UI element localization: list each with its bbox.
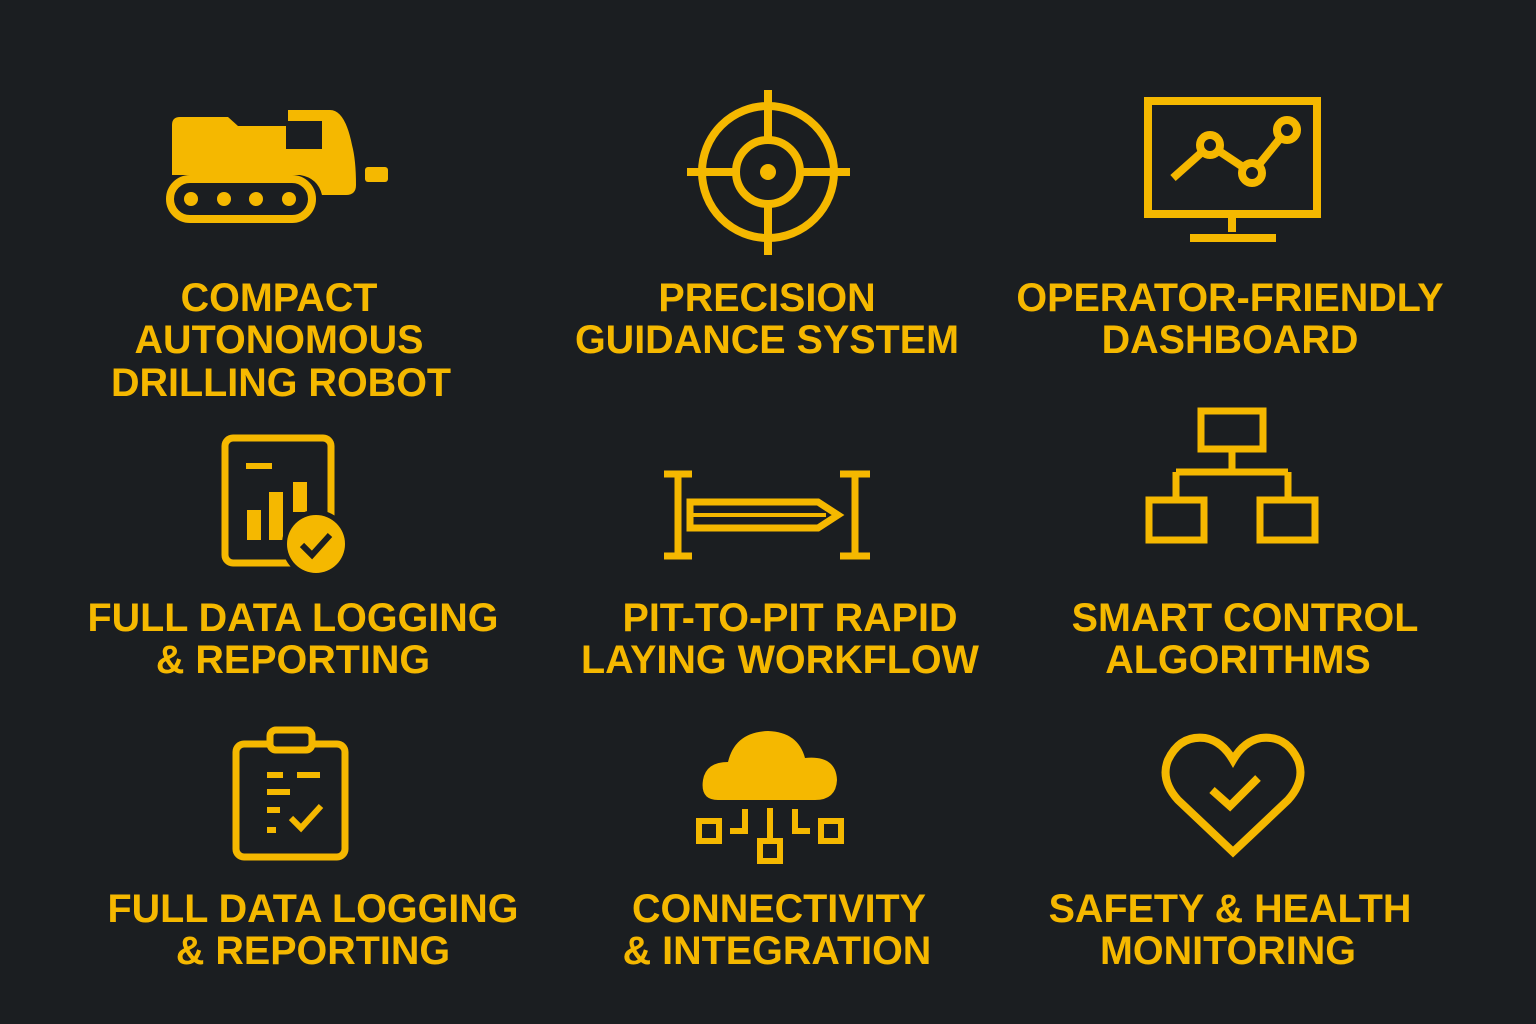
title: data logging 2: FULL DATA LOGGING	[107, 887, 519, 931]
title: smart control: ALGORITHMS	[1105, 638, 1371, 682]
title: safety: MONITORING	[1100, 929, 1356, 973]
title: connectivity: & INTEGRATION	[623, 929, 931, 973]
title: dashboard	[1016, 276, 1444, 362]
title: pit-to-pit: PIT-TO-PIT RAPID	[622, 596, 958, 640]
title: precision: GUIDANCE SYSTEM	[575, 318, 959, 362]
title: data logging 2: & REPORTING	[176, 929, 450, 973]
icon: target	[687, 90, 850, 255]
title: dashboard: OPERATOR-FRIENDLY	[1016, 276, 1444, 320]
title: safety: SAFETY & HEALTH	[1049, 887, 1411, 931]
title: pit-to-pit	[581, 596, 980, 682]
icon: cloud	[699, 731, 841, 861]
title: connectivity: CONNECTIVITY	[632, 887, 926, 931]
icon: pit-to-pit	[664, 474, 870, 556]
title: dashboard: DASHBOARD	[1102, 318, 1358, 362]
title: compact robot	[111, 276, 451, 405]
title: safety	[1049, 887, 1411, 973]
title: precision	[575, 276, 959, 362]
title: precision: PRECISION	[658, 276, 876, 320]
title: compact robot: DRILLING ROBOT	[111, 361, 451, 405]
title: data logging 2	[107, 887, 519, 973]
icon: report	[225, 438, 350, 578]
icon: org chart	[1149, 411, 1315, 540]
title: connectivity	[623, 887, 931, 973]
icon: monitor	[1148, 101, 1317, 238]
icon: heart	[1166, 738, 1300, 852]
title: data logging	[87, 596, 499, 682]
title: compact robot: COMPACT	[181, 276, 377, 320]
title: smart control: SMART CONTROL	[1072, 596, 1418, 640]
title: smart control	[1072, 596, 1418, 682]
title: data logging: & REPORTING	[156, 638, 430, 682]
title: compact robot: AUTONOMOUS	[135, 318, 423, 362]
title: pit-to-pit: LAYING WORKFLOW	[581, 638, 980, 682]
title: data logging: FULL DATA LOGGING	[87, 596, 499, 640]
icon: clipboard	[236, 730, 345, 857]
icon: drilling robot	[170, 110, 388, 219]
